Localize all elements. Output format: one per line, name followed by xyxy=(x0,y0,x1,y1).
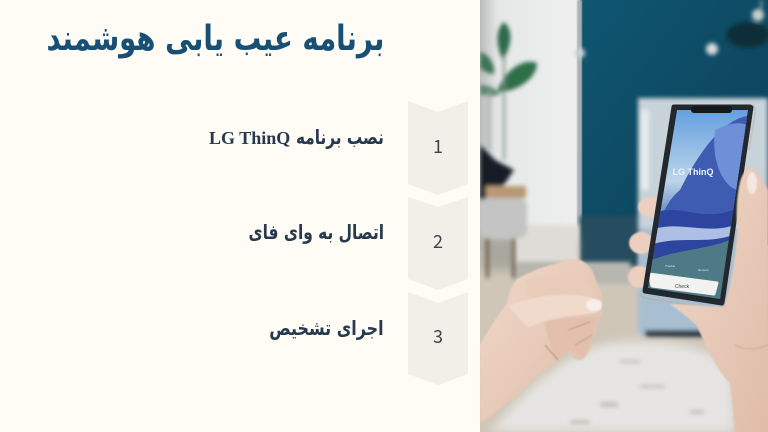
fingernail xyxy=(586,299,602,311)
title: برنامه عیب یابی هوشمند xyxy=(46,19,384,59)
app status labels: Trouble xyxy=(665,264,675,268)
chevron steps xyxy=(408,101,468,385)
phone screen xyxy=(648,110,748,299)
panel: left content background xyxy=(0,0,480,432)
right hand palm and thumb xyxy=(670,168,768,432)
step 1 text: LG ThinQ xyxy=(209,128,290,148)
right hand back fingers xyxy=(628,197,664,288)
phone screen: Check xyxy=(675,284,690,290)
wall decorations xyxy=(575,0,768,58)
check button xyxy=(649,274,717,294)
index finger xyxy=(508,295,601,328)
plant xyxy=(480,22,537,160)
step number 2: 2 xyxy=(433,228,443,254)
smartphone xyxy=(640,104,756,309)
step 2 text: اتصال به وای فای xyxy=(248,220,384,244)
side table with dark object xyxy=(480,145,527,278)
rug xyxy=(490,342,735,432)
step 1 text: نصب برنامه xyxy=(296,125,384,149)
photo: hands holding phone with LG ThinQ app xyxy=(480,0,768,432)
chevron: step 1 xyxy=(408,101,468,195)
notch xyxy=(691,106,732,113)
phone screen: Remote xyxy=(698,268,709,272)
step number 3: 3 xyxy=(433,323,443,349)
curled finger shading xyxy=(545,317,597,360)
background wall xyxy=(480,0,768,432)
step 1 text xyxy=(209,125,384,149)
step 3 text: اجرای تشخیص xyxy=(270,316,384,340)
washing machine xyxy=(638,98,768,337)
chevron: step 2 xyxy=(408,197,468,290)
app name: LG ThinQ xyxy=(672,167,714,177)
left hand xyxy=(480,259,602,423)
chevron: step 3 xyxy=(408,292,468,385)
step number 1: 1 xyxy=(433,133,443,159)
